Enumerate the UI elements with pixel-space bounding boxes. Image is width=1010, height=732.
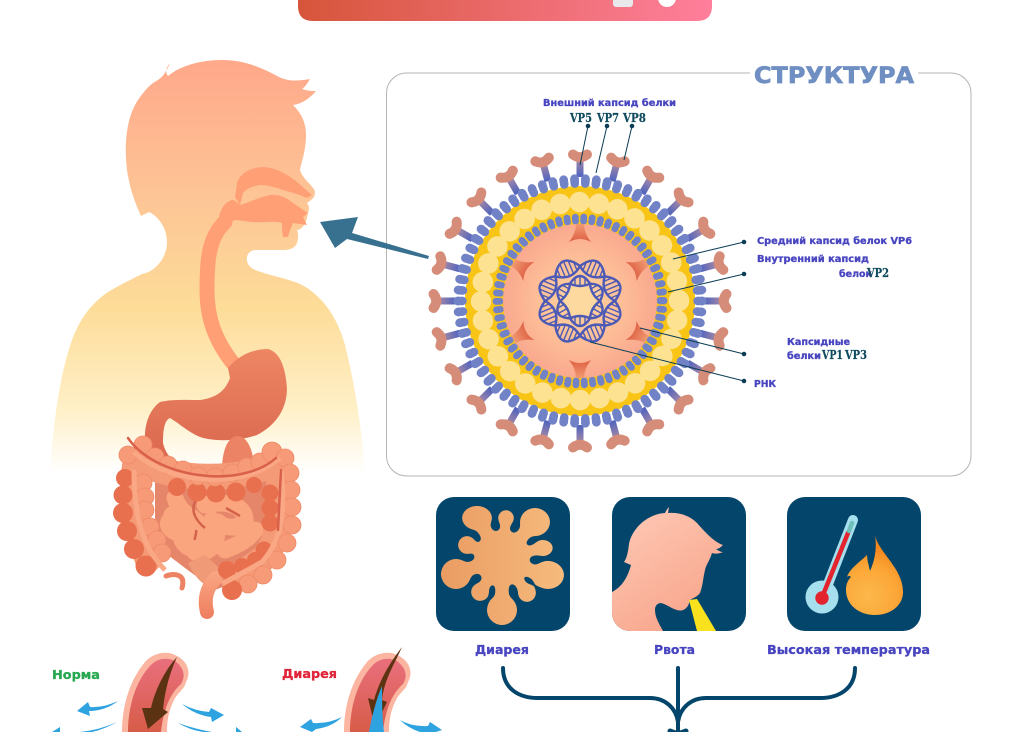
appendix (206, 578, 216, 612)
intestine: diarrhea (344, 647, 411, 732)
virus labels: Средний капсид белок VP6 (757, 235, 912, 247)
virus labels: VP2 (866, 266, 889, 280)
absorption arrows: normal (52, 701, 242, 732)
boy silhouette with digestive system (50, 60, 365, 472)
capsid proteins (508, 224, 652, 378)
top banner (298, 0, 712, 21)
virus labels: VP5 (569, 111, 592, 125)
middle capsid balls (481, 202, 679, 400)
symptom labels (475, 643, 930, 657)
small intestine background (155, 480, 268, 590)
virus labels: VP7 (596, 111, 619, 125)
virus labels (543, 97, 912, 390)
arrow from virus to mouth (320, 217, 429, 259)
thermometer (806, 520, 853, 614)
surface spikes (434, 154, 726, 448)
intestine: normal (122, 653, 189, 732)
icon: fever (787, 497, 921, 631)
inner capsid beads (496, 217, 664, 385)
virus labels: РНК (754, 379, 776, 390)
oral cavity and throat (216, 195, 308, 237)
leader lines (580, 124, 746, 383)
colon light beads (119, 436, 301, 593)
label: normal: Норма (52, 668, 100, 682)
virus diagram (434, 154, 726, 448)
nasal cavity (235, 167, 312, 205)
symptom labels: Диарея (475, 643, 529, 657)
label: diarrhea: Диарея (282, 667, 337, 681)
caecum tail (166, 575, 183, 588)
symptom labels: Рвота (654, 643, 695, 657)
flame (846, 535, 903, 615)
virus labels: VP3 (844, 348, 867, 362)
heading: structure: СТРУКТУРА (754, 64, 914, 89)
intestines (113, 436, 301, 612)
icon: vomiting (612, 497, 746, 631)
virus labels: VP1 (821, 348, 843, 362)
colon bands (134, 452, 283, 584)
symptom labels: Высокая температура (767, 643, 930, 657)
RNA helix (535, 256, 625, 346)
outer capsid beads (458, 178, 702, 424)
panel: structure (386, 64, 971, 476)
gold layer (465, 186, 695, 416)
absorption arrows: diarrhea (300, 717, 442, 732)
core (503, 224, 657, 378)
pancreas (222, 436, 254, 472)
virus labels: Капсидные (787, 337, 850, 348)
body silhouette (50, 60, 365, 472)
stomach (145, 349, 287, 462)
virus labels: белок (839, 268, 872, 280)
bracket arrow (503, 668, 855, 732)
virus labels: Внешний капсид белки (543, 97, 676, 109)
virus labels: VP8 (622, 111, 646, 125)
small intestine loops (168, 498, 255, 552)
virus labels: Внутренний капсид (757, 254, 869, 265)
virus labels: белки (787, 350, 821, 362)
esophagus (207, 222, 232, 362)
colon dark beads (113, 469, 278, 579)
icon: diarrhea (436, 497, 570, 631)
colon backing (133, 460, 280, 576)
